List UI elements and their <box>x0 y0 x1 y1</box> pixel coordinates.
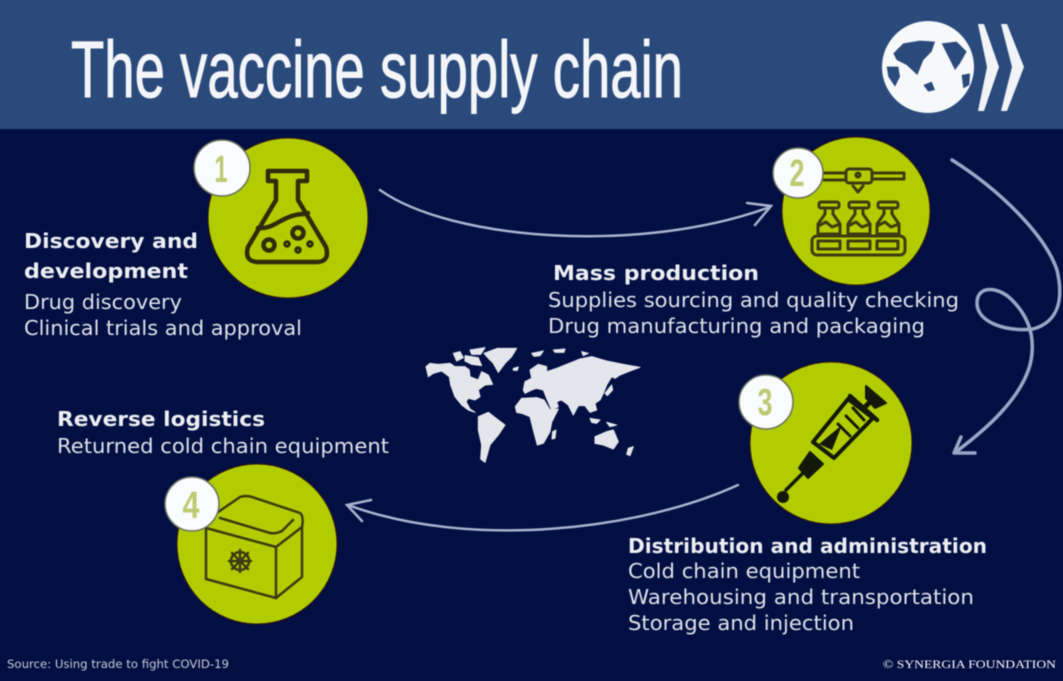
text block: discovery and development: Clinical trials and approval <box>24 316 302 340</box>
title: The vaccine supply chain <box>71 25 683 114</box>
text block: reverse logistics: Reverse logistics <box>57 407 265 431</box>
source note: Source: Using trade to fight COVID-19 <box>7 657 229 671</box>
badge 4: 4 <box>182 485 200 527</box>
arrow: step 3 to step 4 <box>347 485 738 530</box>
step 3: distribution icon <box>739 362 912 524</box>
text block: discovery and development: Drug discovery <box>24 290 182 314</box>
badge 2 <box>773 148 823 198</box>
step 1: discovery icon <box>194 138 368 298</box>
world map <box>426 348 640 462</box>
icon: bottling line <box>812 169 905 255</box>
step 4: reverse logistics icon <box>165 464 337 624</box>
text block: discovery and development: Discovery and <box>24 229 198 253</box>
text block: distribution and administration: Storage and injection <box>628 611 854 635</box>
badge 1 <box>194 140 250 196</box>
badge 1: 1 <box>214 149 228 191</box>
icon: cold box <box>206 496 303 598</box>
badge 3 <box>739 375 793 429</box>
badge 4 <box>165 477 219 531</box>
text block: distribution and administration <box>628 534 987 635</box>
text block: distribution and administration: Distribution and administration <box>628 534 987 558</box>
icon: syringe <box>777 386 886 503</box>
step 2: mass production icon <box>773 137 930 285</box>
badge 3: 3 <box>758 382 772 424</box>
text block: reverse logistics <box>57 407 389 458</box>
text block: mass production: Drug manufacturing and packaging <box>548 314 925 338</box>
text block: mass production: Mass production <box>553 261 759 285</box>
text block: discovery and development: development <box>24 259 188 283</box>
header band <box>0 0 1063 129</box>
icon: flask <box>247 171 327 262</box>
icon: globe logo <box>882 21 1024 113</box>
badge 2: 2 <box>790 153 804 195</box>
text block: mass production <box>548 261 959 338</box>
arrow: step 2 to step 3 with loop <box>952 160 1060 453</box>
text block: distribution and administration: Cold chain equipment <box>628 559 860 583</box>
text block: mass production: Supplies sourcing and quality checking <box>548 288 959 312</box>
text block: distribution and administration: Warehousing and transportation <box>628 585 974 609</box>
text block: discovery and development <box>24 229 302 340</box>
text block: reverse logistics: Returned cold chain equipment <box>57 434 389 458</box>
credit: © SYNERGIA FOUNDATION <box>883 657 1056 671</box>
arrow: step 1 to step 2 <box>380 190 771 236</box>
